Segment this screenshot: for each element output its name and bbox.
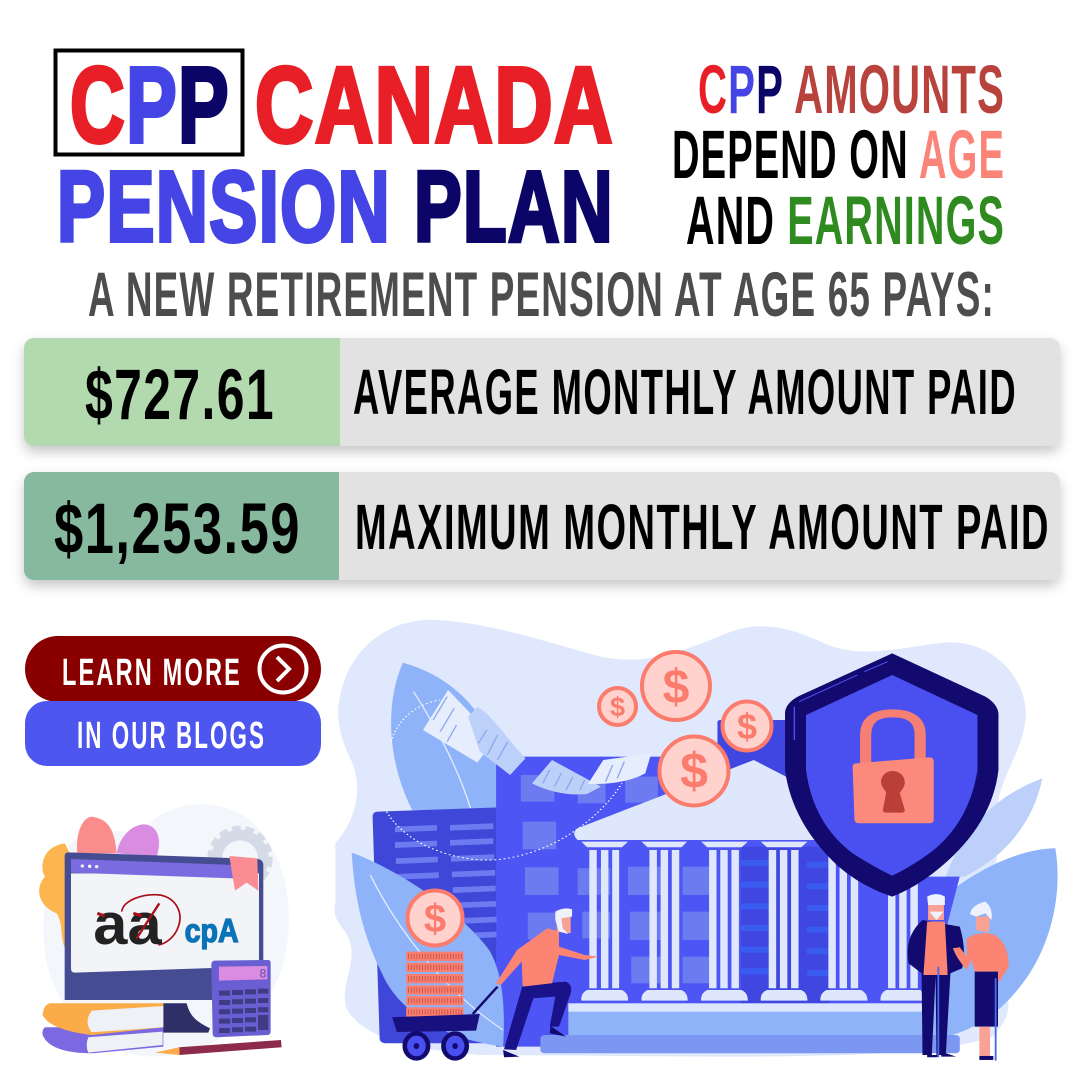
flying papers bbox=[423, 690, 651, 794]
title: CPP Canada Pension Plan bbox=[56, 44, 614, 263]
dotted money path bbox=[387, 700, 622, 860]
background blob bbox=[334, 620, 1026, 1057]
illustration: pension bank bbox=[334, 620, 1058, 1061]
button: in our blogs: IN OUR BLOGS bbox=[77, 715, 266, 757]
background shapes bbox=[43, 804, 289, 1057]
logo: aa cpa: aa bbox=[93, 892, 162, 957]
icon: chevron in circle bbox=[260, 646, 306, 692]
monitor bbox=[65, 852, 263, 1033]
word: PLAN: PLAN bbox=[414, 151, 614, 263]
man pushing wagon bbox=[496, 908, 599, 1057]
temple steps bbox=[540, 1003, 960, 1053]
pencil bbox=[155, 1040, 282, 1055]
icon: dollar coins: $ bbox=[680, 743, 708, 799]
front left leaf bbox=[352, 853, 504, 1047]
shield with lock bbox=[785, 653, 999, 897]
icon: dollar coins: $ bbox=[663, 661, 690, 714]
illustration: monitor with logo, books and calculator bbox=[39, 804, 289, 1057]
calculator: 8 bbox=[260, 967, 267, 981]
icon: dollar coins: $ bbox=[737, 706, 757, 747]
button: learn more bbox=[25, 636, 321, 702]
leaves bbox=[39, 817, 159, 948]
temple columns bbox=[581, 842, 927, 1001]
icon: dollar coins bbox=[408, 652, 772, 946]
coin stack and wagon bbox=[392, 952, 498, 1061]
panel: average monthly amount: $727.61 bbox=[85, 356, 275, 435]
CPP boxed acronym: CPP bbox=[70, 44, 230, 165]
gear bbox=[210, 828, 270, 888]
books bbox=[42, 1003, 163, 1053]
word: PENSION: PENSION bbox=[57, 151, 391, 263]
back leaves bbox=[391, 663, 1058, 1040]
elderly couple bbox=[908, 894, 1009, 1061]
icon: dollar coins: $ bbox=[610, 692, 625, 722]
word: CANADA: CANADA bbox=[255, 44, 614, 165]
logo: aa cpa bbox=[93, 892, 239, 957]
button: in our blogs bbox=[25, 701, 321, 766]
panel: maximum monthly amount bbox=[24, 472, 1060, 580]
panel: maximum monthly amount: $1,253.59 bbox=[54, 490, 301, 569]
button: learn more: LEARN MORE bbox=[62, 652, 242, 694]
temple roof bbox=[574, 760, 829, 840]
icon: dollar coins: $ bbox=[424, 897, 446, 941]
subtitle: amounts depend on age and earnings bbox=[672, 51, 1005, 259]
calculator bbox=[211, 960, 271, 1037]
panel: average monthly amount bbox=[24, 338, 1060, 446]
buildings bbox=[373, 720, 960, 1047]
logo: aa cpa: cpA bbox=[185, 913, 239, 950]
icon: padlock bbox=[853, 713, 934, 823]
